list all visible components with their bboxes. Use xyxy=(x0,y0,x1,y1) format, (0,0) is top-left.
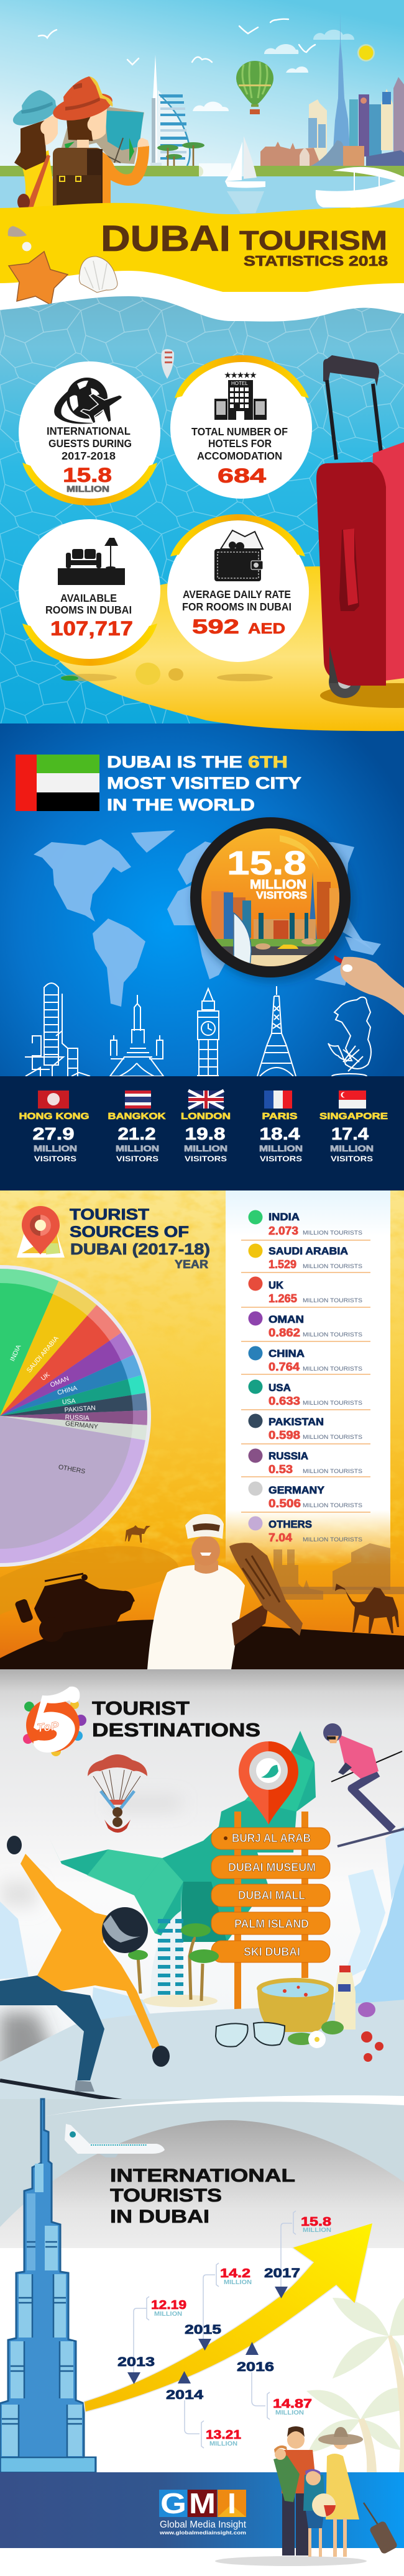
snowy background xyxy=(0,1669,404,2116)
pie slice labels: PAKISTAN xyxy=(64,1404,96,1414)
scallop shell xyxy=(79,256,117,293)
sand pebbles and shadows xyxy=(61,663,273,685)
city: Paris: VISITORS xyxy=(260,1156,302,1163)
dome xyxy=(0,2120,404,2475)
pie slice labels: INDIA xyxy=(9,1344,22,1363)
legend: Russia xyxy=(249,1448,362,1476)
pie slice labels: USA xyxy=(62,1397,76,1406)
heading xyxy=(70,1206,210,1271)
city: Singapore: VISITORS xyxy=(331,1156,373,1163)
pie slice labels: OMAN xyxy=(49,1375,70,1389)
landmark: Bangkok xyxy=(110,995,163,1077)
clouds xyxy=(193,30,354,111)
heading: INTERNATIONAL xyxy=(110,2166,295,2186)
GMI logo: G xyxy=(160,2487,186,2519)
city: Bangkok: 21.2 xyxy=(118,1124,155,1143)
plane xyxy=(65,2124,165,2157)
city: Singapore xyxy=(319,1091,388,1163)
bridge xyxy=(199,163,231,176)
landmark: Big Ben xyxy=(197,989,219,1076)
man with falcon xyxy=(147,1514,303,1669)
UAE flag xyxy=(16,755,99,811)
section: sixth most visited city xyxy=(0,753,404,1190)
city: London xyxy=(181,1091,231,1163)
icon: wallet with cash xyxy=(214,530,263,581)
value 12.19: MILLION xyxy=(154,2311,182,2318)
icon: sofa and lamp xyxy=(58,538,125,585)
legend: Oman: MILLION TOURISTS xyxy=(303,1331,362,1338)
value 14.2: MILLION xyxy=(224,2279,252,2286)
board labels: SKI DUBAI xyxy=(244,1946,300,1958)
Burj Khalifa xyxy=(0,2099,96,2472)
city: Paris: PARIS xyxy=(262,1111,297,1122)
legend: India: 2.073 xyxy=(269,1225,298,1237)
legend: Russia: 0.53 xyxy=(269,1463,293,1476)
gold bowl xyxy=(257,1978,334,2032)
legend: Saudi Arabia: SAUDI ARABIA xyxy=(269,1245,348,1257)
landmark: Hong Kong xyxy=(25,983,90,1077)
jeep silhouette xyxy=(14,1574,134,1642)
desert ground xyxy=(0,1620,404,1669)
hotels label: HOTELS FOR xyxy=(208,437,272,450)
legend: Saudi Arabia: 1.529 xyxy=(269,1258,296,1271)
rate label: AVERAGE DAILY RATE xyxy=(183,588,291,601)
section: tourist sources xyxy=(0,1190,404,1669)
city: Bangkok: BANGKOK xyxy=(108,1111,166,1122)
legend: China xyxy=(249,1346,362,1373)
heading: YEAR xyxy=(175,1258,208,1271)
landmark: Eiffel Tower xyxy=(257,986,296,1076)
year 2014 marker xyxy=(166,2371,203,2402)
city: London: VISITORS xyxy=(185,1156,227,1163)
hotels label: ACCOMODATION xyxy=(197,450,282,462)
city: Hong Kong: VISITORS xyxy=(34,1156,76,1163)
city: London: 19.8 xyxy=(185,1124,225,1143)
rate label: FOR ROOMS IN DUBAI xyxy=(182,601,292,613)
pie slice labels: RUSSIA xyxy=(65,1413,90,1422)
year 2016 marker xyxy=(237,2342,274,2374)
sky band xyxy=(0,2099,404,2242)
legend: China: CHINA xyxy=(269,1348,305,1359)
city: Hong Kong: HONG KONG xyxy=(19,1111,90,1122)
legend: Saudi Arabia xyxy=(249,1243,362,1271)
legend: India xyxy=(249,1210,362,1237)
value 14.87 xyxy=(273,2397,312,2416)
city: Hong Kong xyxy=(19,1091,90,1163)
GMI logo xyxy=(159,2487,246,2519)
legend: USA: 0.633 xyxy=(269,1395,300,1407)
heading: DESTINATIONS xyxy=(92,1719,260,1741)
rate value: 592 xyxy=(192,615,239,638)
map pin xyxy=(239,1741,298,1825)
city: London: MILLION xyxy=(184,1143,227,1153)
section: header illustration xyxy=(0,0,404,335)
skier xyxy=(323,1723,404,1846)
world map xyxy=(34,830,381,1007)
pie slice labels: CHINA xyxy=(57,1384,78,1397)
value 15.8: 15.8 xyxy=(301,2215,331,2229)
heading: TOURISTS xyxy=(110,2185,222,2206)
value 12.19 xyxy=(151,2298,186,2318)
footer band xyxy=(0,2472,404,2548)
Burj Al Arab xyxy=(150,55,190,166)
heading: IN DUBAI xyxy=(110,2206,209,2227)
Dubai skyline xyxy=(260,11,404,166)
legend: Russia: MILLION TOURISTS xyxy=(303,1468,362,1475)
hand holding magnifier xyxy=(334,955,404,1015)
GMI logo: M xyxy=(189,2487,216,2519)
UAE map xyxy=(49,1731,316,1942)
legend: Pakistan xyxy=(249,1413,362,1441)
value 15.8 xyxy=(301,2215,331,2234)
city: Paris xyxy=(259,1091,303,1163)
lens text: 15.8 xyxy=(227,845,306,882)
sailboat xyxy=(225,136,265,213)
legend: Germany xyxy=(249,1482,362,1510)
landmark: Merlion xyxy=(328,997,371,1079)
legend: Germany: MILLION TOURISTS xyxy=(303,1502,362,1509)
birds xyxy=(39,19,315,65)
value 13.21: MILLION xyxy=(209,2441,237,2447)
guests value xyxy=(63,464,112,494)
sand strip xyxy=(0,203,404,292)
year 2013 marker: 2013 xyxy=(117,2355,155,2369)
icon: hotel building: ★★★★★ xyxy=(224,371,257,379)
legend dividers xyxy=(241,1240,370,1512)
rooms label: ROOMS IN DUBAI xyxy=(45,604,132,616)
heading: 6TH xyxy=(248,753,288,771)
signpost xyxy=(211,1741,330,2021)
legend: USA xyxy=(249,1380,362,1407)
GMI name and URL xyxy=(159,2519,247,2536)
family xyxy=(215,2426,398,2566)
value 13.21 xyxy=(206,2428,241,2447)
board labels: BURJ AL ARAB xyxy=(232,1832,311,1844)
green land xyxy=(0,166,404,176)
city: Paris: 18.4 xyxy=(260,1124,300,1143)
blue ice splash xyxy=(0,1826,404,2062)
heading: SOURCES OF xyxy=(70,1223,189,1241)
faded palms xyxy=(306,2298,404,2472)
legend: China: MILLION TOURISTS xyxy=(303,1366,362,1372)
stat: rooms xyxy=(19,519,160,666)
legend: Russia: RUSSIA xyxy=(269,1450,308,1462)
legend: Germany: GERMANY xyxy=(269,1484,325,1496)
pie chart xyxy=(0,1265,151,1567)
section: top 5 destinations xyxy=(0,1669,404,2116)
legend: UK: 1.265 xyxy=(269,1292,297,1305)
jasmine and garland xyxy=(288,2021,383,2062)
pie slice labels xyxy=(9,1335,98,1476)
board labels: PALM ISLAND xyxy=(234,1918,309,1930)
water xyxy=(0,176,404,220)
snowboarder xyxy=(0,1836,170,2105)
city: Singapore: 17.4 xyxy=(331,1124,369,1143)
beach pebbles xyxy=(8,226,31,251)
legend: UK: MILLION TOURISTS xyxy=(303,1297,362,1304)
woman with blue hat xyxy=(10,90,60,210)
legend: Pakistan: MILLION TOURISTS xyxy=(303,1434,362,1441)
water background xyxy=(0,296,404,723)
stat: international guests xyxy=(19,361,160,506)
suitcase xyxy=(316,355,404,708)
guests value: 15.8 xyxy=(63,464,112,486)
city: Bangkok: MILLION xyxy=(116,1143,159,1153)
hotels label xyxy=(191,425,288,462)
heading: DUBAI IS THE xyxy=(107,753,242,771)
map facets xyxy=(87,1751,314,1942)
sun xyxy=(357,44,375,61)
legend: USA: MILLION TOURISTS xyxy=(303,1400,362,1407)
section: water with stat circles xyxy=(0,296,404,731)
perfume bottle and orchid xyxy=(335,1966,375,2030)
value 14.2 xyxy=(220,2267,252,2286)
hotels value: 684 xyxy=(218,465,266,487)
camel silhouette xyxy=(335,1584,399,1633)
value 14.87: MILLION xyxy=(275,2410,304,2416)
hotels label: TOTAL NUMBER OF xyxy=(191,425,288,438)
white panel below dome xyxy=(0,2248,404,2475)
guests label: INTERNATIONAL xyxy=(47,425,131,437)
city: Bangkok: VISITORS xyxy=(116,1156,158,1163)
city: London: LONDON xyxy=(181,1111,231,1122)
sand island xyxy=(59,566,404,731)
guests label: 2017-2018 xyxy=(62,450,116,462)
legend: India: INDIA xyxy=(269,1211,300,1223)
section: blue world background xyxy=(0,714,404,1077)
city: Hong Kong: MILLION xyxy=(34,1143,77,1153)
callout connectors xyxy=(134,2211,296,2448)
heading: DUBAI (2017-18) xyxy=(70,1241,210,1258)
water taxi xyxy=(301,167,404,219)
heading: TOURIST xyxy=(92,1697,190,1719)
pie slice labels: SAUDI ARABIA xyxy=(25,1335,60,1374)
city: Paris: MILLION xyxy=(259,1143,303,1153)
pie slice labels: OTHERS xyxy=(58,1463,86,1476)
map xyxy=(60,107,144,164)
year 2017 marker: 2017 xyxy=(264,2266,300,2280)
legend: Others xyxy=(249,1517,362,1544)
sign boards xyxy=(211,1828,330,1962)
lens text: VISITORS xyxy=(256,889,307,901)
city: Bangkok xyxy=(108,1091,166,1163)
parachute xyxy=(88,1754,147,1833)
rooms label: AVAILABLE xyxy=(60,592,117,604)
value 12.19: 12.19 xyxy=(151,2298,186,2312)
man with red hat xyxy=(50,76,149,219)
icon: hotel building: HOTEL xyxy=(231,381,248,386)
legend: Pakistan: PAKISTAN xyxy=(269,1416,324,1428)
distant city silhouette xyxy=(273,1543,404,1600)
heading: IN THE WORLD xyxy=(107,796,255,814)
small cruise ship xyxy=(161,349,174,379)
legend: UK xyxy=(249,1277,362,1305)
legend: Oman: 0.862 xyxy=(269,1327,300,1339)
city: Hong Kong: 27.9 xyxy=(32,1124,75,1143)
heading: TOURIST xyxy=(70,1206,149,1223)
legend: China: 0.764 xyxy=(269,1361,300,1373)
heading xyxy=(110,2166,295,2227)
grey fold shadows xyxy=(0,1798,180,2087)
section: international tourists xyxy=(0,2095,404,2566)
guests label: GUESTS DURING xyxy=(48,437,132,450)
legend panel xyxy=(226,1190,390,1566)
legend: Others: MILLION TOURISTS xyxy=(303,1536,362,1543)
stat: hotels xyxy=(170,355,312,499)
heading xyxy=(92,1697,260,1741)
city: Singapore: SINGAPORE xyxy=(319,1111,388,1122)
board labels: DUBAI MUSEUM xyxy=(228,1861,316,1874)
desert background xyxy=(0,1190,404,1669)
rooms label xyxy=(45,592,132,616)
legend: USA: USA xyxy=(269,1382,291,1394)
year 2014 marker: 2014 xyxy=(166,2388,203,2402)
value 14.2: 14.2 xyxy=(220,2267,250,2280)
icon: hotel building xyxy=(214,371,267,420)
Burj Al Arab and palms xyxy=(128,1889,219,2007)
value 15.8: MILLION xyxy=(303,2227,331,2234)
white foam wave xyxy=(0,271,404,335)
legend: Others: 7.04 xyxy=(269,1531,292,1544)
GMI name and URL: Global Media Insight xyxy=(160,2519,247,2530)
palm trees xyxy=(157,142,204,166)
city: Singapore: MILLION xyxy=(330,1143,374,1153)
value 13.21: 13.21 xyxy=(206,2428,241,2442)
GMI logo: I xyxy=(227,2487,236,2519)
magnifying glass xyxy=(190,817,356,982)
board labels: DUBAI MALL xyxy=(238,1889,305,1902)
Top 5 badge: ToP xyxy=(36,1720,60,1735)
heading xyxy=(107,753,301,814)
snow bank xyxy=(44,2095,404,2116)
pie slice labels: UK xyxy=(40,1371,52,1382)
rate value xyxy=(192,615,285,638)
year 2017 marker xyxy=(264,2266,300,2298)
legend: Others: OTHERS xyxy=(269,1518,312,1530)
hot air balloon xyxy=(236,61,273,114)
value 14.87: 14.87 xyxy=(273,2397,312,2411)
lens text: MILLION xyxy=(250,878,306,892)
starfish xyxy=(9,252,68,305)
stat: daily rate xyxy=(167,514,309,662)
Top 5 badge xyxy=(23,1687,86,1756)
rooms value: 107,717 xyxy=(50,617,133,640)
rate label xyxy=(182,588,292,613)
sunglasses xyxy=(216,2023,285,2047)
icon: globe and plane xyxy=(54,378,122,424)
snow ground xyxy=(0,2000,404,2116)
title xyxy=(101,219,388,269)
legend: UK: UK xyxy=(269,1279,284,1291)
lens text xyxy=(227,845,307,901)
heading: MOST VISITED CITY xyxy=(107,774,301,792)
legend: Germany: 0.506 xyxy=(269,1497,301,1510)
title: DUBAI xyxy=(101,219,231,259)
board labels xyxy=(228,1832,316,1958)
guests value: MILLION xyxy=(67,484,109,494)
dune and small camel xyxy=(0,1525,178,1615)
pin and map icon xyxy=(17,1206,65,1258)
year 2015 marker: 2015 xyxy=(185,2323,221,2337)
title: TOURISM xyxy=(239,225,387,256)
year 2016 marker: 2016 xyxy=(237,2360,274,2374)
title: STATISTICS 2018 xyxy=(244,253,388,269)
legend: Saudi Arabia: MILLION TOURISTS xyxy=(303,1263,362,1270)
guests label xyxy=(47,425,132,462)
legend: Oman xyxy=(249,1312,362,1339)
cities band xyxy=(0,1076,404,1190)
year 2013 marker xyxy=(117,2355,155,2384)
GMI name and URL: www.globalmediainsight.com xyxy=(159,2529,247,2536)
rate value: AED xyxy=(248,620,285,637)
year 2015 marker xyxy=(185,2323,221,2351)
legend: Oman: OMAN xyxy=(269,1313,304,1325)
legend: Pakistan: 0.598 xyxy=(269,1429,300,1441)
growth arrow xyxy=(84,2223,373,2412)
pie slice labels: GERMANY xyxy=(65,1420,98,1431)
legend: India: MILLION TOURISTS xyxy=(303,1230,362,1236)
